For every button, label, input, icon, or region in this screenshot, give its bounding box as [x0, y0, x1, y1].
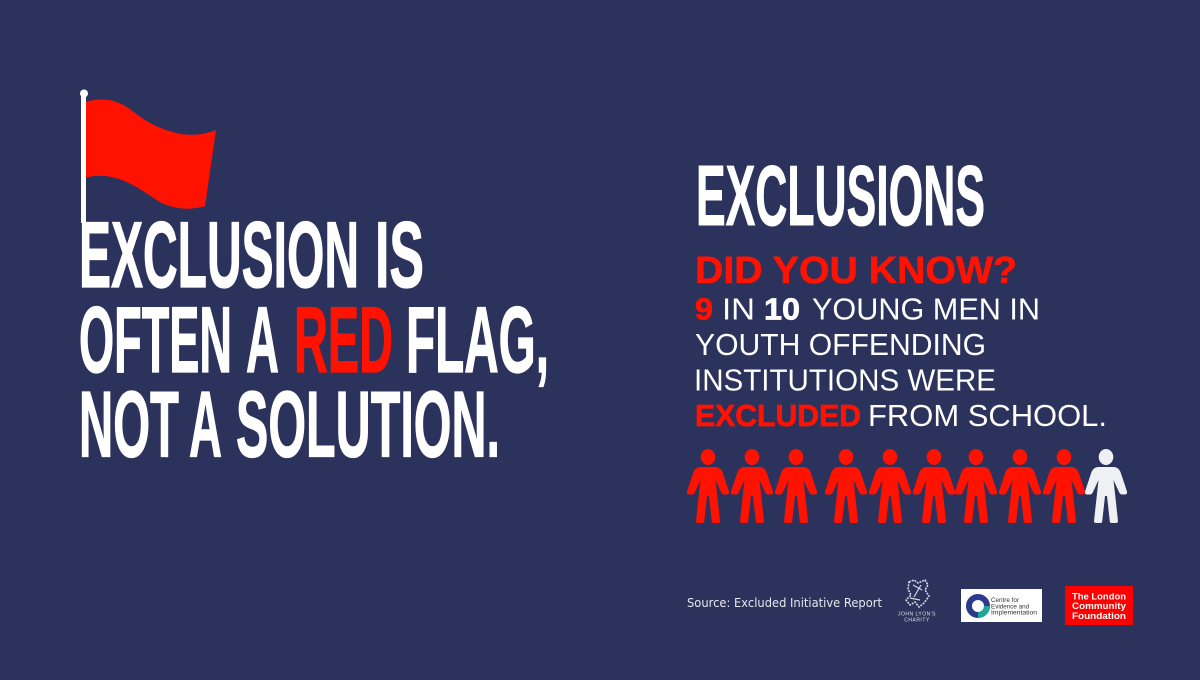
- headline: IS: [375, 202, 424, 307]
- headline: SOLUTION.: [236, 372, 500, 476]
- logo: Centre for Evidence and Implementation: Evidence and: [991, 604, 1030, 610]
- logo: The London Community Foundation: Foundation: [1072, 611, 1126, 622]
- logo: The London Community Foundation: The London: [1072, 592, 1126, 602]
- text block: statistic: EXCLUDED: [695, 398, 861, 433]
- headline: RED: [294, 287, 393, 392]
- logo: The London Community Foundation: Community: [1072, 601, 1127, 612]
- text block: statistic: 10: [764, 292, 800, 326]
- text block: statistic: YOUTH OFFENDING: [695, 327, 986, 362]
- text block: statistic: INSTITUTIONS WERE: [694, 362, 996, 398]
- headline: A: [246, 287, 279, 392]
- headline: A: [189, 372, 222, 476]
- headline: NOT: [79, 372, 179, 476]
- logo: Centre for Evidence and Implementation: [961, 589, 1042, 622]
- logo: John Lyon's Charity: CHARITY: [904, 618, 930, 624]
- text block: statistic: YOUNG MEN IN: [812, 292, 1040, 326]
- icon: red flag: [80, 90, 216, 223]
- logo: Centre for Evidence and Implementation: Implementation: [991, 610, 1038, 616]
- logo: John Lyon's Charity: JOHN LYON'S: [898, 612, 936, 618]
- headline: OFTEN: [79, 287, 232, 392]
- logo: John Lyon's Charity: [898, 580, 936, 624]
- source note: Source: Excluded Initiative Report: [687, 595, 882, 610]
- logo: Centre for Evidence and Implementation: Centre for: [991, 597, 1019, 604]
- pictogram: 9 of 10 people: [687, 449, 1127, 523]
- text block: statistic: [694, 292, 1107, 433]
- headline: FLAG,: [406, 287, 549, 392]
- logo: The London Community Foundation: [1065, 586, 1133, 625]
- heading: did you know: DID YOU KNOW?: [695, 250, 1017, 292]
- text block: statistic: FROM SCHOOL.: [868, 398, 1107, 433]
- text block: statistic: IN: [722, 292, 755, 326]
- text block: statistic: 9: [695, 292, 713, 326]
- headline: [79, 202, 549, 476]
- headline: EXCLUSION: [79, 202, 359, 307]
